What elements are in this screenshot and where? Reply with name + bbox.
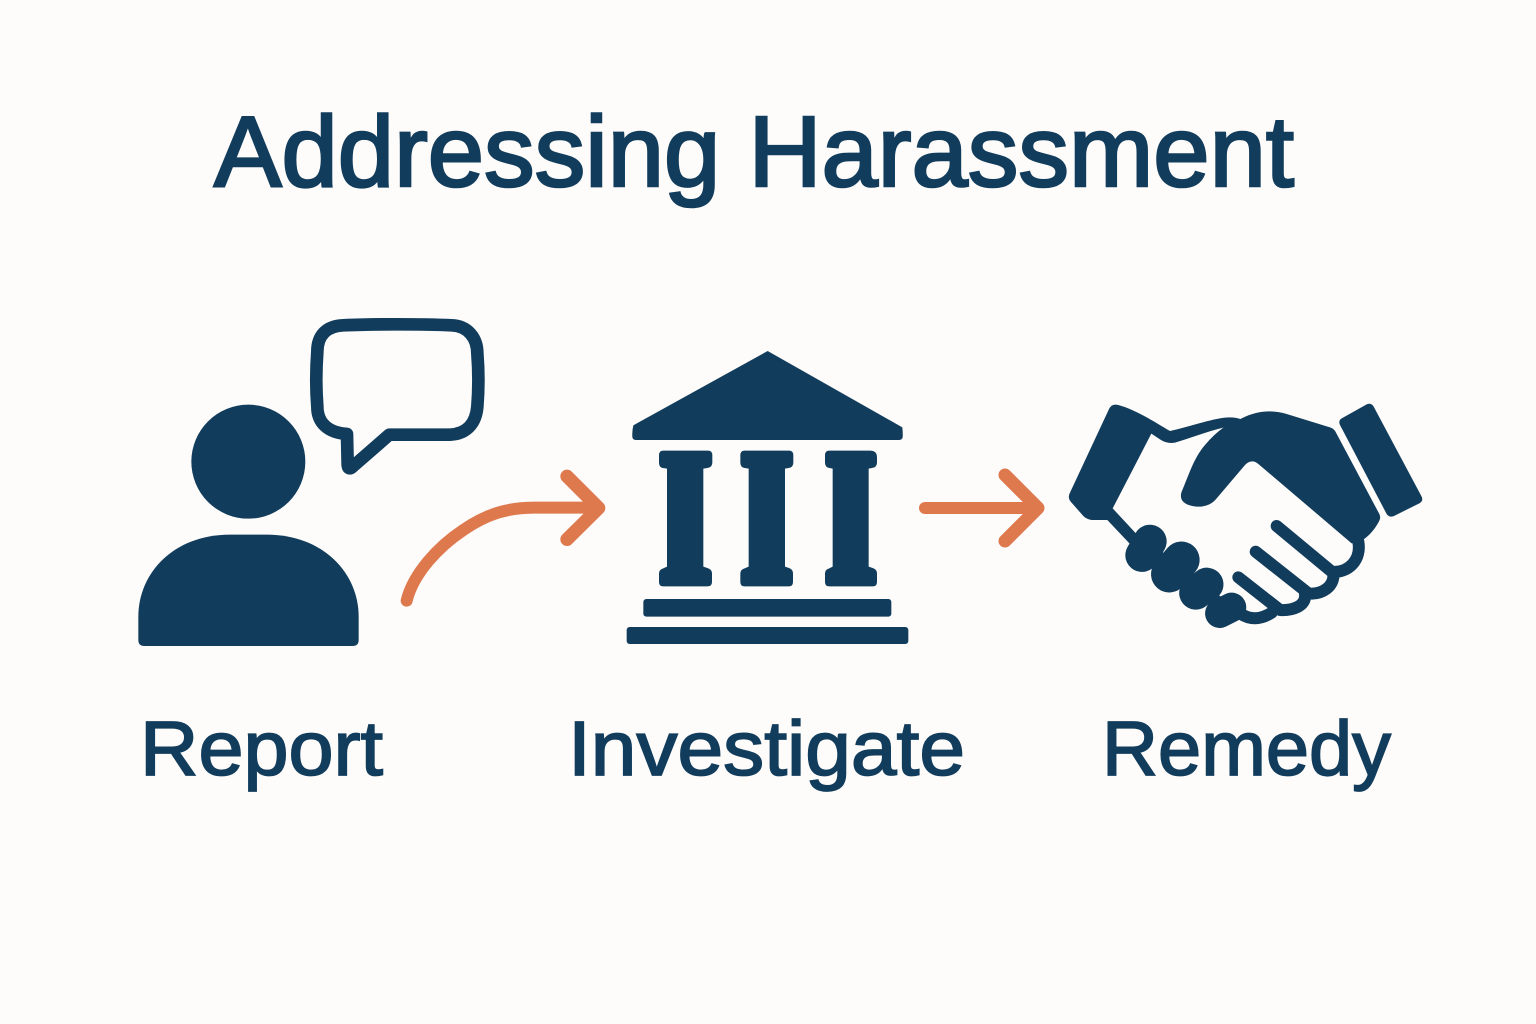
roof pediment (632, 351, 903, 440)
right hand (1181, 411, 1380, 543)
speech bubble (316, 324, 478, 468)
arrow: investigate to remedy (925, 475, 1038, 541)
lower step (627, 627, 908, 644)
label: Report: Report (140, 706, 383, 792)
column left (659, 451, 712, 586)
right cuff (1339, 404, 1422, 517)
left cuff and thin wrist band (1069, 405, 1243, 544)
person body (138, 535, 359, 646)
fingers outline (1238, 526, 1359, 618)
column right (825, 451, 877, 586)
column middle (740, 451, 793, 586)
arrow: report to investigate (407, 476, 599, 601)
label: Investigate: Investigate (568, 706, 965, 792)
step 1 icon: person with speech bubble (138, 324, 478, 646)
step 3 icon: handshake (1069, 404, 1422, 633)
title: Addressing Harassment (214, 96, 1294, 208)
knuckles (1119, 519, 1251, 633)
step 2 icon: institution building (627, 351, 908, 644)
person head (191, 405, 305, 519)
upper step (643, 599, 891, 617)
label: Remedy: Remedy (1102, 706, 1391, 792)
